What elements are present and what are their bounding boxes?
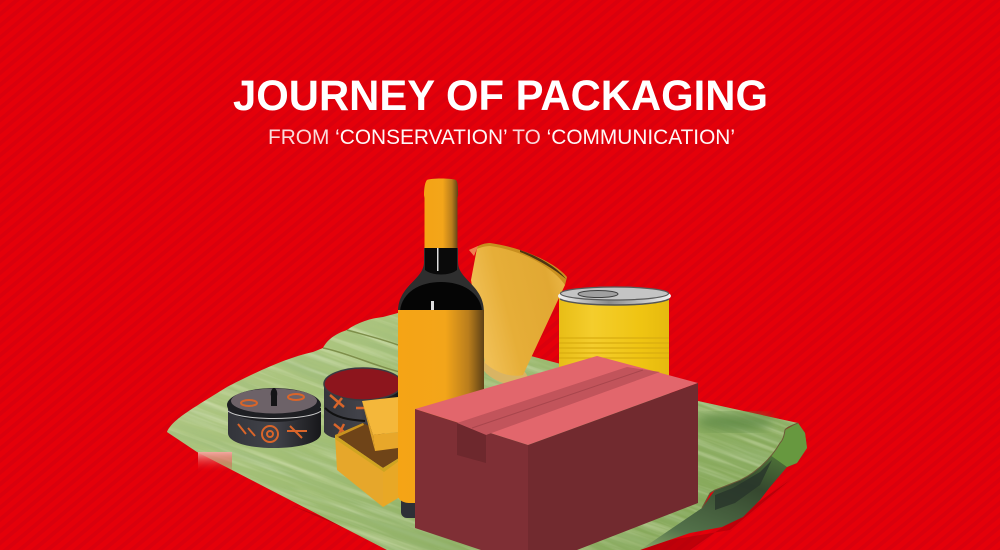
gold box rim — [335, 435, 399, 472]
banana leaf — [167, 313, 807, 550]
leaf dark veins — [167, 313, 798, 550]
neck black — [425, 248, 457, 274]
shoulder black dome — [400, 282, 482, 311]
stacked tin motifs — [330, 395, 366, 436]
gold box rim back — [335, 423, 364, 437]
can body — [559, 298, 669, 378]
gold box interior — [335, 423, 399, 468]
stacked tin interior — [324, 368, 402, 400]
cup rim — [469, 243, 567, 285]
box top face — [415, 356, 698, 445]
can lid — [560, 287, 668, 300]
cup lip left — [469, 246, 478, 256]
paper cup — [469, 243, 567, 391]
leaf edge line — [702, 423, 798, 508]
gold box lid front — [373, 432, 398, 451]
can pull tab — [578, 290, 618, 298]
can rim lower edge — [560, 299, 669, 305]
cup body — [471, 244, 565, 376]
leaf underside — [600, 423, 807, 550]
stacked tin gap — [325, 408, 365, 421]
tape on top — [457, 367, 660, 435]
bottle label — [398, 310, 484, 503]
gold box lid top — [362, 397, 398, 435]
leaf underside dark fold — [715, 460, 772, 510]
gold box — [335, 397, 400, 507]
bottle capsule — [424, 178, 458, 248]
tin knob — [271, 388, 277, 406]
tin body — [228, 408, 321, 448]
glass highlight — [431, 301, 434, 310]
box right face — [528, 383, 698, 550]
bottle glass — [398, 248, 484, 312]
neck highlight — [437, 248, 438, 271]
faded artifact — [198, 452, 232, 472]
cardboard box — [415, 356, 698, 550]
tin motifs — [238, 394, 307, 442]
leaf surface — [167, 313, 798, 550]
stacked open tin — [324, 368, 402, 439]
stacked tin body — [324, 384, 398, 439]
tape seam — [472, 370, 643, 428]
leaf inner curl — [770, 423, 807, 467]
can rim — [558, 286, 671, 306]
gold box lid side — [362, 401, 375, 451]
tin can — [558, 286, 671, 378]
leaf shadow — [290, 480, 790, 550]
cup rim dark edge — [520, 250, 566, 279]
can ridges — [559, 338, 669, 358]
box left face — [415, 409, 528, 550]
right dark blotch — [697, 413, 773, 431]
round lidded tin — [227, 388, 321, 448]
lid top highlight — [231, 388, 317, 414]
tin lid — [227, 388, 321, 422]
tape flap — [457, 423, 486, 463]
wine bottle — [398, 178, 484, 518]
gold box left face — [335, 435, 383, 507]
title: JOURNEY OF PACKAGING — [233, 72, 768, 120]
top fold lines — [323, 330, 400, 372]
subtitle: FROM ‘CONSERVATION’ TO ‘COMMUNICATION’ — [268, 126, 735, 149]
gold box right face — [383, 458, 400, 507]
tin rim — [228, 411, 321, 418]
bottle base — [401, 495, 431, 518]
leaf light veins — [167, 313, 798, 550]
cup bottom — [479, 353, 531, 391]
